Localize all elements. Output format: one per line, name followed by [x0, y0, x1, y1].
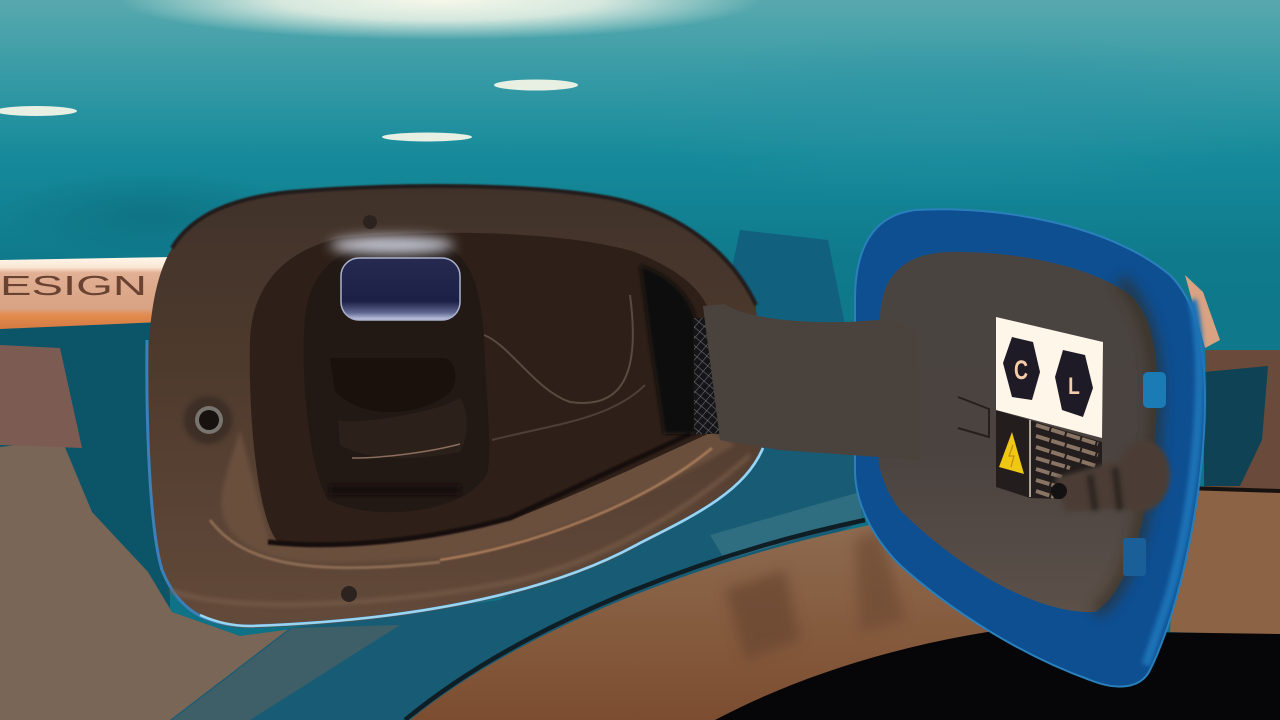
warning triangle: [999, 432, 1024, 474]
charging recess outer frame: [147, 186, 763, 628]
lower door panel with reflections: [0, 230, 1280, 720]
lamp glow: [330, 236, 454, 254]
ceiling light reflections: [0, 80, 578, 142]
flap embossed rectangle: [958, 397, 989, 437]
right body badge tip: [1185, 275, 1220, 348]
latch pin: [1051, 440, 1170, 512]
flap hinge arm: [703, 304, 920, 460]
hexagon L: L: [1068, 372, 1080, 400]
rim lower ledge: [222, 430, 735, 563]
warning sticker: black panel: [996, 410, 1102, 500]
lower brown sill: [405, 488, 1280, 720]
cables: [484, 295, 633, 403]
recess inner cavity: [250, 233, 712, 545]
flap inner dark panel: [878, 252, 1157, 612]
wheel arch: [715, 630, 1280, 720]
blue clips: [1123, 372, 1166, 576]
flap right edge shading: [1095, 280, 1156, 612]
badge text: ESIGN: [0, 270, 147, 301]
lamp: [341, 258, 460, 320]
mounting hole: [184, 396, 232, 444]
recess blue edge: [147, 340, 763, 626]
hexagon C: C: [1014, 355, 1028, 385]
CL label sticker: [996, 317, 1103, 438]
charging socket cover: [304, 240, 489, 512]
warning text lines: [1036, 425, 1098, 497]
design badge strip: [0, 257, 174, 329]
flap blue outer shell: [855, 209, 1205, 687]
hinge mesh: [694, 318, 720, 434]
